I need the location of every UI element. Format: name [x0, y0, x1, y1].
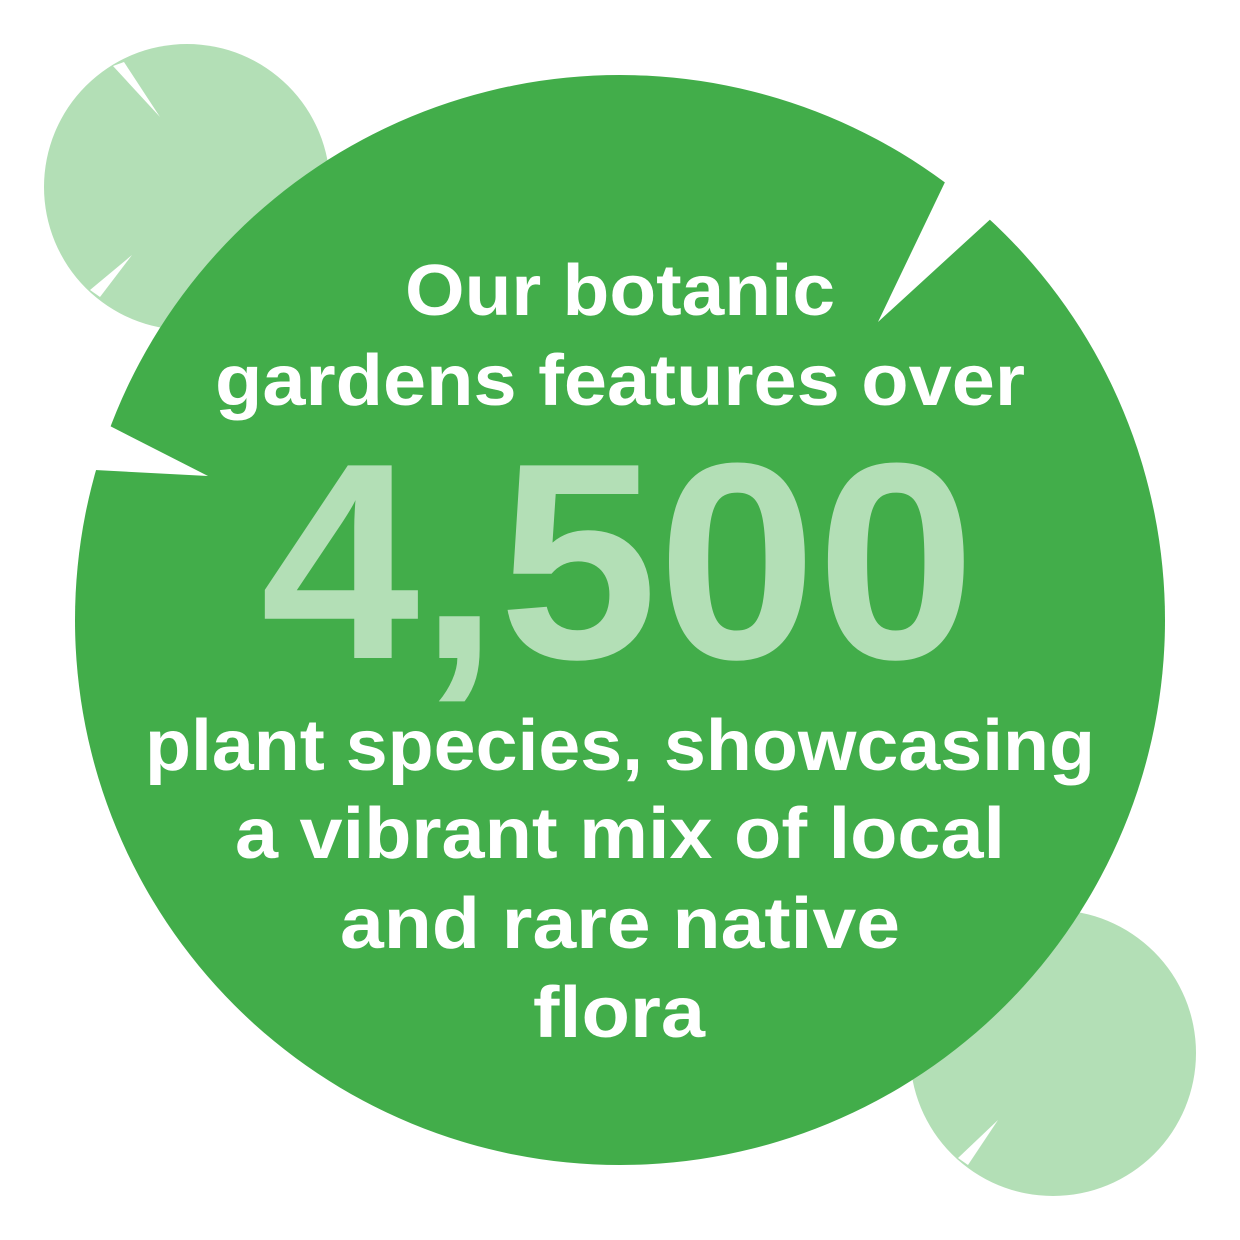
lily pad: bottom-right — [910, 910, 1196, 1196]
text: description — [145, 706, 1095, 1053]
text: description: plant species, showcasing — [145, 706, 1095, 786]
text: intro — [215, 251, 1025, 421]
text: intro: Our botanic — [405, 251, 835, 331]
big number: 4,500 — [260, 406, 976, 718]
text: intro: gardens features over — [215, 341, 1025, 421]
text: description: flora — [533, 973, 706, 1053]
text: description: and rare native — [340, 884, 900, 964]
lily pad: top-left — [44, 44, 330, 330]
text: description: a vibrant mix of local — [235, 794, 1005, 874]
main lily pad circle — [60, 75, 1165, 1165]
